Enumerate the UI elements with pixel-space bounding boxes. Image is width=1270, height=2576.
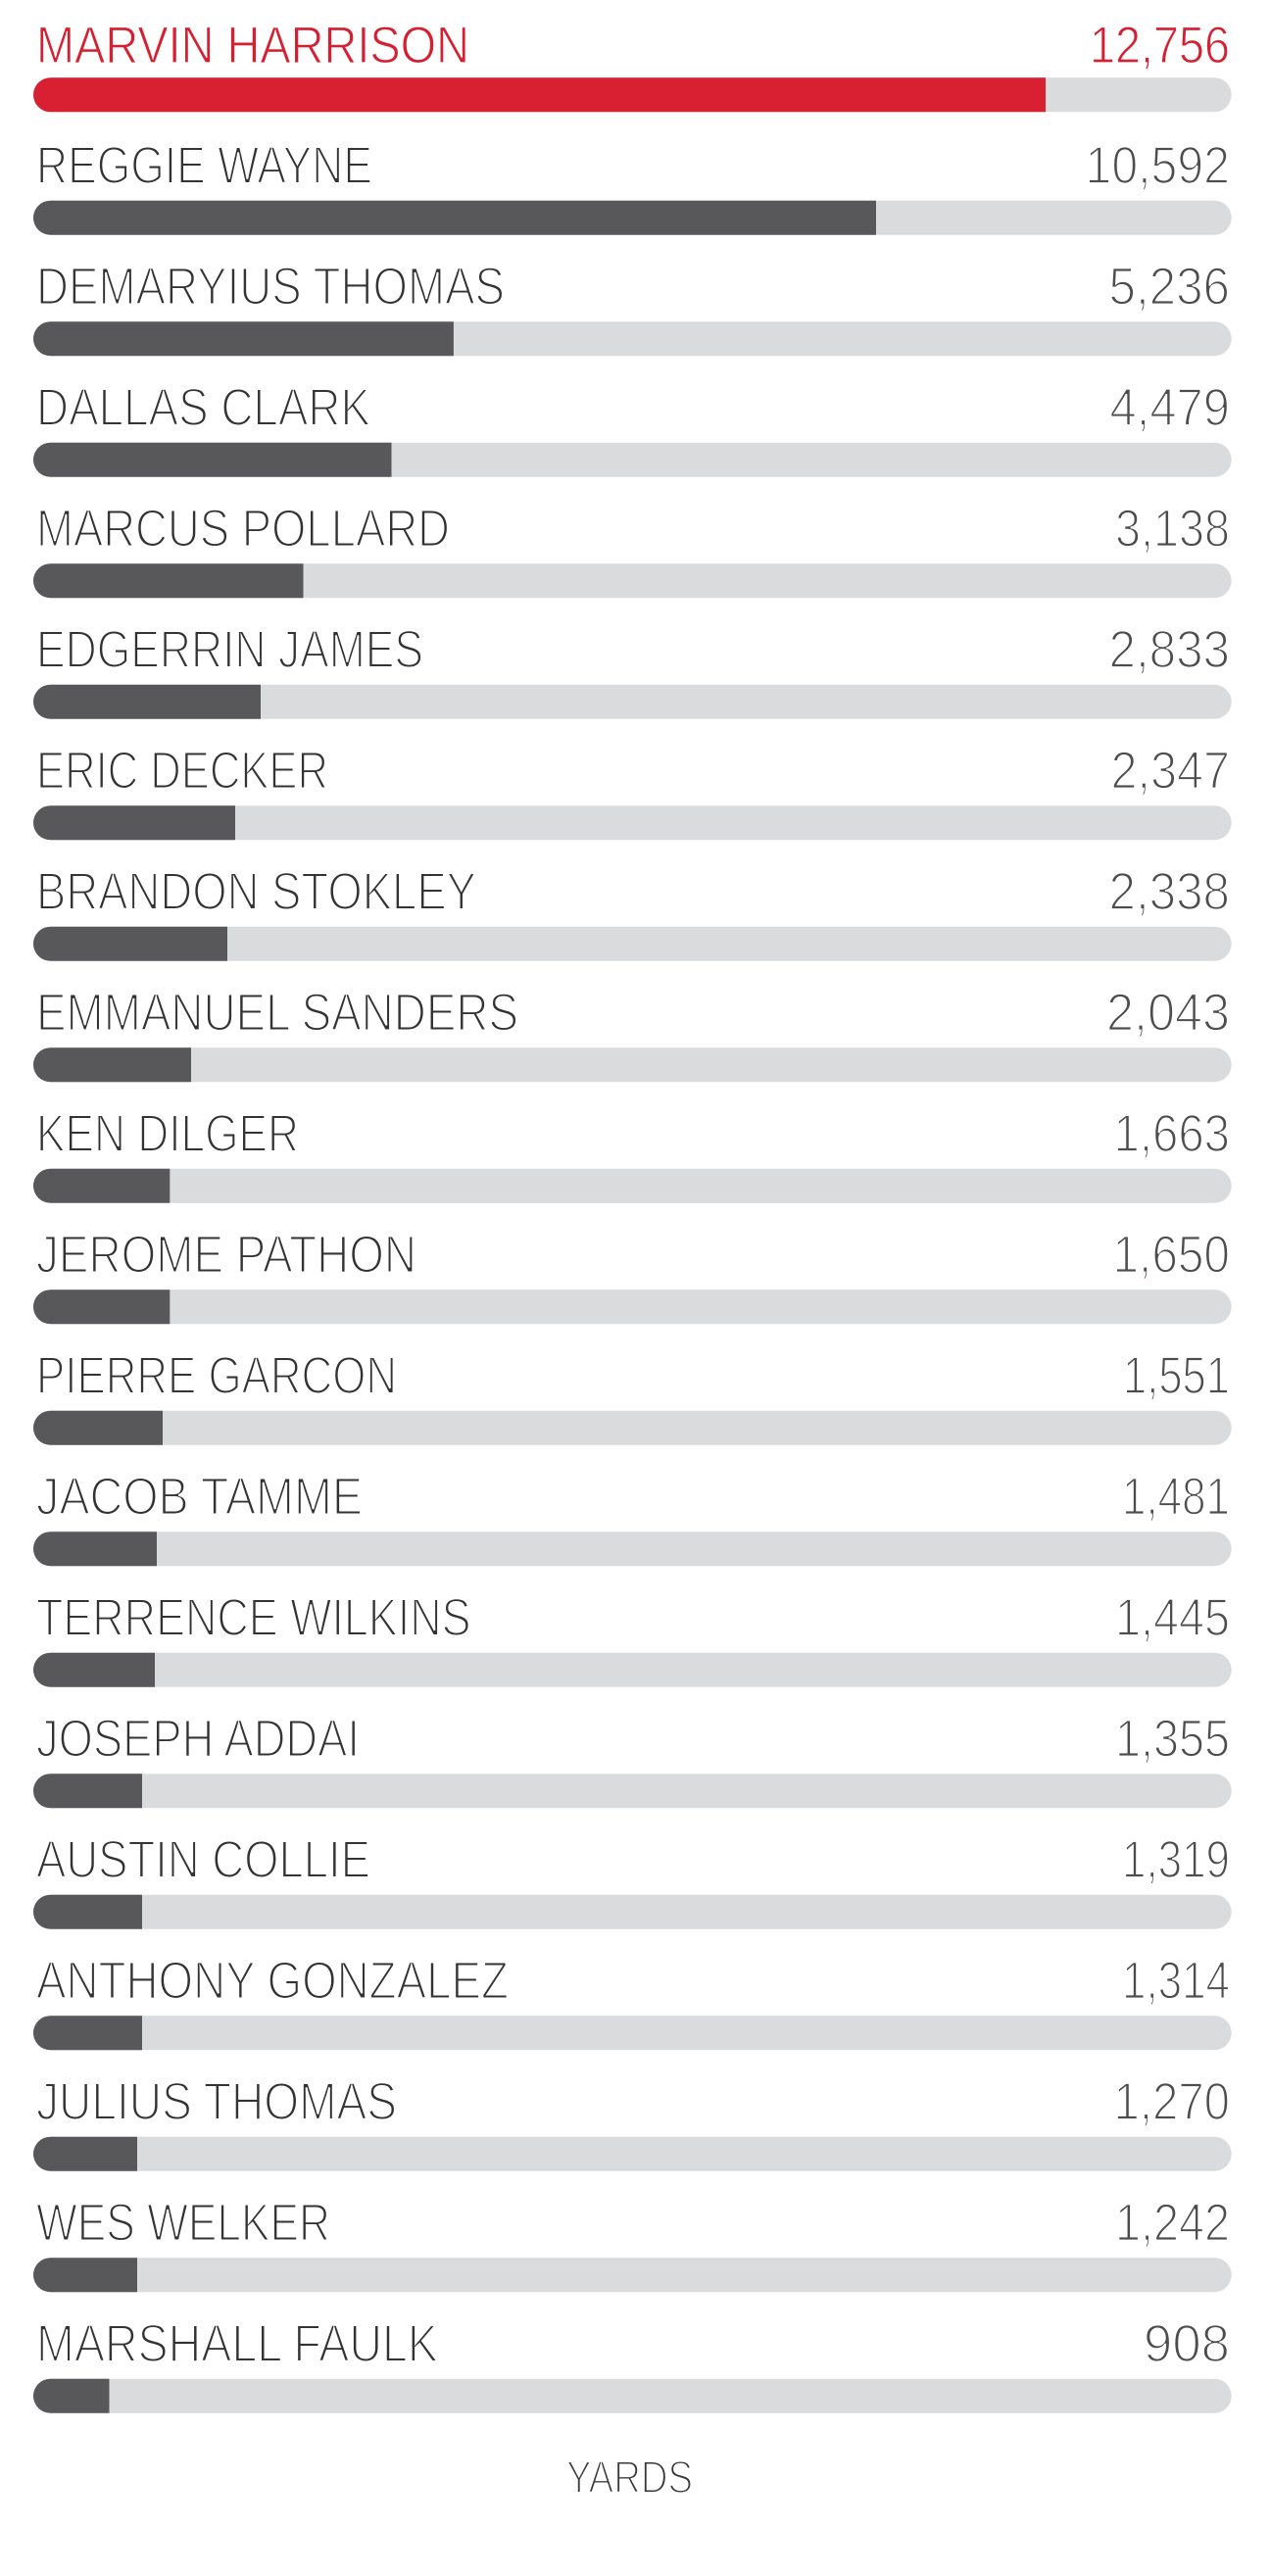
row: Eric Decker xyxy=(33,743,1232,840)
yards value: 1,445 xyxy=(1115,1589,1230,1647)
bar value xyxy=(33,927,227,961)
player name: BRANDON STOKLEY xyxy=(36,863,476,921)
bar track xyxy=(33,927,1232,961)
bar value xyxy=(33,443,392,477)
bar track xyxy=(33,1774,1232,1808)
yards value: 1,481 xyxy=(1122,1468,1230,1527)
player name: JOSEPH ADDAI xyxy=(36,1711,360,1768)
yards value: 1,270 xyxy=(1113,2073,1230,2131)
player name: TERRENCE WILKINS xyxy=(36,1589,470,1647)
bar value xyxy=(33,685,261,719)
yards value: 1,319 xyxy=(1122,1831,1230,1889)
row: Dallas Clark xyxy=(33,379,1232,477)
bar value xyxy=(33,1047,191,1082)
bar track xyxy=(33,1047,1232,1082)
yards value: 1,551 xyxy=(1123,1347,1230,1405)
bar value xyxy=(33,2016,142,2050)
row: Reggie Wayne xyxy=(33,137,1232,235)
bar track xyxy=(33,1895,1232,1929)
bar track xyxy=(33,1653,1232,1687)
bar value xyxy=(33,1531,157,1566)
bar track xyxy=(33,2137,1232,2171)
bar track xyxy=(33,1289,1232,1324)
yards value: 4,479 xyxy=(1109,379,1230,437)
yards value: 2,347 xyxy=(1111,743,1230,800)
bar track xyxy=(33,563,1232,598)
yards value: 1,650 xyxy=(1113,1227,1230,1284)
row: Brandon Stokley xyxy=(33,863,1232,961)
yards value: 908 xyxy=(1144,2315,1230,2373)
bar value xyxy=(33,201,876,235)
yards value: 1,663 xyxy=(1113,1105,1230,1163)
row: Demaryius Thomas xyxy=(33,259,1232,356)
yards value: 3,138 xyxy=(1115,500,1230,559)
axis label: yards: YARDS xyxy=(566,2452,693,2503)
bar track xyxy=(33,2258,1232,2292)
player name: PIERRE GARCON xyxy=(36,1347,397,1405)
player name: KEN DILGER xyxy=(36,1105,299,1163)
row: Austin Collie xyxy=(33,1831,1232,1929)
row: Anthony Gonzalez xyxy=(33,1952,1232,2050)
bar track xyxy=(33,2016,1232,2050)
row: Marshall Faulk xyxy=(33,2315,1232,2413)
row: Pierre Garcon xyxy=(33,1347,1232,1445)
row: Joseph Addai xyxy=(33,1711,1232,1808)
bar value xyxy=(33,1169,170,1203)
row: Emmanuel Sanders xyxy=(33,984,1232,1082)
player name: ANTHONY GONZALEZ xyxy=(36,1952,509,2011)
player name: MARSHALL FAULK xyxy=(36,2315,438,2373)
row: Marcus Pollard xyxy=(33,500,1232,598)
bar value xyxy=(33,1895,142,1929)
bar value xyxy=(33,805,235,840)
yards value: 12,756 xyxy=(1090,17,1230,74)
bar value xyxy=(33,321,454,356)
player name: JEROME PATHON xyxy=(36,1227,416,1284)
bar track xyxy=(33,685,1232,719)
player name: EDGERRIN JAMES xyxy=(36,621,423,679)
player name: MARVIN HARRISON xyxy=(36,17,469,74)
row: Jacob Tamme xyxy=(33,1468,1232,1566)
player name: JULIUS THOMAS xyxy=(36,2073,397,2131)
bar track xyxy=(33,77,1232,112)
bar value xyxy=(33,77,1046,112)
yards value: 10,592 xyxy=(1086,137,1230,195)
row: Jerome Pathon xyxy=(33,1227,1232,1324)
player name: REGGIE WAYNE xyxy=(36,137,372,195)
bar track xyxy=(33,1169,1232,1203)
bar track xyxy=(33,1531,1232,1566)
player name: MARCUS POLLARD xyxy=(36,500,450,559)
bar track xyxy=(33,805,1232,840)
yards value: 1,314 xyxy=(1122,1952,1230,2011)
bar value xyxy=(33,1289,170,1324)
player name: DALLAS CLARK xyxy=(36,379,370,437)
bar value xyxy=(33,1774,142,1808)
row: Edgerrin James xyxy=(33,621,1232,719)
row: Wes Welker xyxy=(33,2195,1232,2292)
bar value xyxy=(33,563,304,598)
bar value xyxy=(33,1411,163,1445)
bar track xyxy=(33,321,1232,356)
player name: AUSTIN COLLIE xyxy=(36,1831,370,1889)
bar track xyxy=(33,2379,1232,2413)
bar track xyxy=(33,443,1232,477)
bar value xyxy=(33,2379,110,2413)
row: Julius Thomas xyxy=(33,2073,1232,2171)
bar value xyxy=(33,2137,137,2171)
bar track xyxy=(33,201,1232,235)
yards value: 1,355 xyxy=(1115,1711,1230,1768)
yards value: 2,043 xyxy=(1106,984,1230,1043)
player name: ERIC DECKER xyxy=(36,743,328,800)
yards value: 1,242 xyxy=(1115,2195,1230,2252)
yards value: 2,833 xyxy=(1109,621,1230,679)
player name: DEMARYIUS THOMAS xyxy=(36,259,505,316)
row: Terrence Wilkins xyxy=(33,1589,1232,1687)
player name: WES WELKER xyxy=(36,2195,330,2252)
player name: EMMANUEL SANDERS xyxy=(36,984,518,1043)
yards value: 5,236 xyxy=(1109,259,1230,316)
yards value: 2,338 xyxy=(1109,863,1230,921)
row: Ken Dilger xyxy=(33,1105,1232,1203)
bar value xyxy=(33,2258,137,2292)
bar value xyxy=(33,1653,155,1687)
player name: JACOB TAMME xyxy=(36,1468,363,1527)
row: Marvin Harrison xyxy=(33,17,1232,112)
bar track xyxy=(33,1411,1232,1445)
